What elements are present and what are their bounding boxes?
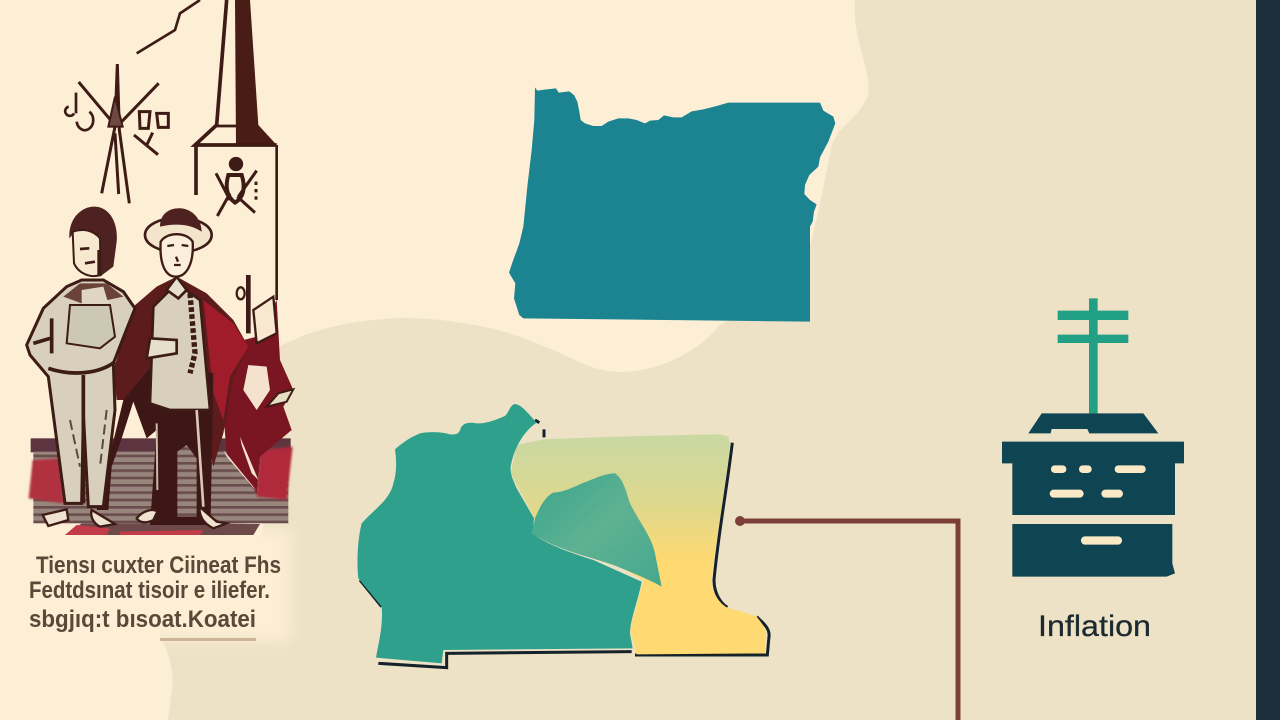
face [160,234,193,277]
signpost [1058,298,1128,413]
belt and leg seams [33,318,115,503]
map inner leaf region [532,473,662,587]
shoes [137,507,227,528]
garbled caption text [29,552,281,633]
face [73,230,101,276]
caption underline [160,638,256,641]
body [27,280,135,507]
cabinet upper drawer [1002,442,1184,515]
right man [97,208,248,528]
cabinet lid [1028,413,1158,433]
waistcoat [150,283,210,410]
vintage illustration: two men and monument [27,0,293,535]
icon: inflation cabinet with signpost [1002,298,1184,577]
map teal region [357,404,642,663]
decorative red drapery [223,275,293,493]
apron and collar [67,305,115,348]
antenna symbol [65,64,168,203]
caption line 2: Fedtdsınat tisoir e iliefer. [29,577,270,604]
monument emblem [216,158,257,216]
right edge bar [1256,0,1280,720]
trousers [97,360,227,525]
connector start dot [735,516,745,526]
left man [27,207,135,527]
hat crown [160,208,202,232]
floor with stripes [29,438,293,535]
background: soft light glow behind caption [20,530,290,640]
hat brim [145,218,212,252]
caption line 3: sbgjıq:t bısoat.Koatei [29,606,256,633]
map: tri-colour state [357,404,769,668]
shoes [43,509,115,527]
label: Inflation: Inflation [1038,610,1151,643]
map yellow region [511,434,766,654]
caption line 1: Tiensı cuxter Ciineat Fhs [36,552,281,579]
stripes between trouser legs [177,445,197,517]
map: Oregon silhouette [509,87,835,322]
hat [69,207,117,277]
cabinet lower drawer [1012,524,1175,577]
connector arrow line [740,521,958,720]
cape red highlight [203,300,248,420]
drawer slots [1050,465,1146,545]
monument tower [195,0,277,300]
cracked line in the sky [137,0,200,53]
cape [113,277,248,467]
map shadow edges [360,420,769,668]
